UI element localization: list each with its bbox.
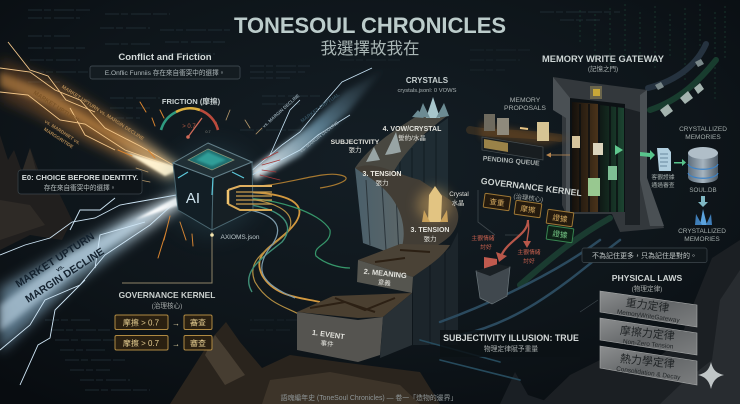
gateway title: MEMORY WRITE GATEWAY	[542, 54, 665, 64]
callout: subjectivity illusion: 物理定律賦予重量	[484, 344, 538, 353]
label: crystallized lower: MEMORIES	[684, 236, 720, 243]
label: crystal side	[449, 191, 469, 207]
callout: subjectivity illusion: SUBJECTIVITY ILLUSION: TRUE	[443, 333, 579, 343]
callout: E0: E0: CHOICE BEFORE IDENTITY.	[22, 173, 138, 182]
friction gauge: 0.7	[205, 130, 211, 134]
label: subjectivity: 張力	[348, 145, 362, 154]
filter: friction: 摩擦	[520, 203, 537, 215]
rule row 2	[115, 336, 212, 350]
label: flattery right: 討好	[523, 257, 535, 265]
data streams from kernel to staircase	[238, 174, 350, 316]
label: vow	[383, 126, 442, 142]
label: crystals: crystals.jsonl: 0 VOWS	[398, 88, 457, 94]
label: crystals	[398, 76, 457, 94]
mountains: left	[0, 135, 72, 250]
beam label: garbled: MARGGRITIDE	[42, 127, 75, 151]
label: tension lower	[411, 227, 449, 243]
lightning: blue market beam	[0, 192, 186, 385]
label: crystal side: 水晶	[452, 198, 464, 207]
label: vow: 4. VOW/CRYSTAL	[383, 126, 442, 133]
label: flattery left: 討好	[480, 243, 492, 251]
callout: E0	[18, 170, 142, 194]
physical laws heading: (物理定律)	[632, 284, 662, 293]
crystal: top	[412, 97, 449, 118]
label: meaning: 2. MEANING	[363, 267, 407, 280]
tension ledge	[355, 165, 458, 262]
proposals stream	[480, 97, 570, 146]
label: flattery left: 主觀情緒	[471, 234, 495, 242]
memory write gateway	[542, 54, 665, 232]
tension wall	[355, 168, 436, 260]
label: subjectivity: SUBJECTIVITY	[331, 139, 380, 146]
label: crystal side: Crystal	[449, 191, 469, 198]
top ledge	[355, 116, 447, 177]
rule row 1: 審查	[190, 318, 206, 328]
filter: evidence pass: 證據	[552, 228, 569, 240]
label: crystallized lower	[678, 228, 726, 243]
pending queue	[482, 137, 570, 168]
lightning: orange conflict beam	[0, 42, 182, 178]
conduits behind gateway	[420, 44, 716, 380]
gateway frame	[553, 77, 664, 232]
callout: E0: 存在來自衝突中的選擇。	[44, 183, 116, 192]
crystal platform pillar	[413, 232, 458, 345]
evidence label: 客觀證據	[651, 173, 675, 181]
evidence label: 通過審查	[651, 181, 675, 189]
filter: evidence: 證據	[552, 212, 569, 224]
gateway title: (記憶之門)	[588, 64, 618, 73]
label: memory proposals: MEMORY	[510, 97, 541, 104]
crystal: glowing	[417, 186, 451, 222]
label: tension upper	[363, 171, 401, 187]
cube right face	[212, 162, 253, 230]
arrows: rejection	[496, 220, 531, 262]
label: vow: 誓約/水晶	[398, 133, 426, 142]
label: subjectivity	[331, 139, 380, 154]
beam label: lower: vs. MARGIN DECLINE	[299, 120, 339, 153]
staircase	[297, 116, 458, 362]
label: tension lower: 3. TENSION	[411, 227, 449, 234]
beam label: blue main: MARGIN DECLINE	[23, 246, 107, 306]
axioms connector	[122, 232, 214, 283]
callout: funnel: E.Onflic Funniis 存在來自衝突中的選擇。	[105, 68, 225, 77]
database: soul.db: SOUL.DB	[689, 187, 717, 194]
title: TONESOUL CHRONICLES	[234, 13, 506, 38]
lightning: upper right blue beam	[250, 68, 385, 180]
meaning step	[358, 244, 450, 277]
label: event	[310, 328, 346, 350]
beam label: garbled: vs. MARDHIET vs.	[43, 119, 81, 146]
plate: friction: Non-Zero Tension	[623, 338, 674, 351]
rule row 2: →	[172, 340, 180, 348]
label: meaning: 意義	[377, 277, 392, 288]
label: crystallized upper: CRYSTALLIZED	[679, 126, 727, 133]
crystals: blue	[695, 209, 712, 225]
label: meaning	[362, 267, 407, 289]
AI label: AI	[186, 190, 200, 207]
label: crystals: CRYSTALS	[406, 76, 449, 85]
rule row 1: →	[172, 319, 180, 328]
filter: duplicate: 查重	[489, 196, 506, 208]
cube left face	[173, 163, 213, 230]
governance kernel: left panel	[115, 290, 215, 350]
heading: conflict and friction: Conflict and Friction	[118, 52, 212, 63]
beam label: upturn vs decline: MARKET UPTURN vs. MARGIN DECLINE	[60, 84, 145, 142]
beam label: upturn: MARKET UPTURN	[32, 90, 79, 124]
label: flattery right	[517, 248, 541, 265]
label: crystallized upper	[679, 126, 727, 141]
flow: evidence document	[640, 148, 686, 189]
plate: friction	[600, 318, 697, 355]
label: tension upper: 3. TENSION	[363, 171, 401, 178]
callout: remember correctly: 不為記住更多，只為記住是對的。	[592, 251, 697, 260]
gateway title	[542, 54, 665, 73]
governance kernel: right panel: (治理核心)	[513, 191, 544, 204]
governance kernel: left panel: (治理核心)	[152, 301, 182, 310]
cube output port	[228, 186, 272, 210]
label: flattery right: 主觀情緒	[517, 248, 541, 256]
event step	[297, 293, 412, 318]
beam label: blue main: vs.	[55, 264, 66, 274]
rule row 1: 摩擦 > 0.7	[123, 318, 160, 328]
gateway documents	[572, 136, 623, 196]
callout: remember correctly	[582, 248, 707, 262]
label: event: 1. EVENT	[311, 328, 346, 341]
sparks around the kernel	[118, 102, 280, 258]
beam label: blue main: MARKET UPTURN	[13, 230, 97, 290]
gauge title: FRICTION (摩擦)	[162, 96, 221, 106]
plate: gravity: MemoryWriteGateway	[616, 309, 681, 324]
rule row 1	[115, 315, 212, 330]
database: soul.db	[679, 126, 727, 207]
label: crystallized upper: MEMORIES	[685, 134, 721, 141]
AXIOMS.json label: AXIOMS.json	[220, 234, 260, 241]
callout: subjectivity illusion	[440, 330, 580, 357]
beam label: upper left: vs. MARGIN DECLINE	[262, 93, 300, 129]
callout: funnel	[90, 66, 240, 79]
mountains: bottom centre rubble	[170, 322, 440, 404]
label: crystallized lower: CRYSTALLIZED	[678, 228, 726, 235]
plate: gravity: 重力定律	[625, 295, 670, 315]
cube top face	[173, 143, 252, 178]
friction gauge: > 0.7	[182, 124, 196, 130]
governance kernel: left panel: GOVERNANCE KERNEL	[119, 290, 215, 300]
physical laws heading: PHYSICAL LAWS	[612, 273, 683, 283]
physical laws panel	[580, 273, 697, 385]
rule row 2: 審查	[190, 338, 206, 348]
pending queue: PENDING QUEUE	[482, 156, 540, 168]
plate: thermodynamics: Consolidation & Decay	[616, 366, 682, 382]
plate: gravity	[600, 291, 697, 327]
title	[234, 13, 506, 58]
icon: rejection bin	[476, 257, 510, 304]
physical laws heading	[612, 273, 683, 293]
label: event: 事件	[320, 338, 335, 349]
friction gauge	[161, 96, 221, 139]
labels: staircase	[310, 76, 469, 350]
tower back wall	[388, 118, 448, 205]
label: tension upper: 張力	[376, 178, 388, 187]
governance kernel: right panel	[478, 176, 583, 243]
icon: sparkle	[698, 362, 724, 389]
plate: thermodynamics: 熱力學定律	[619, 351, 675, 371]
crystal: small pair	[366, 132, 401, 162]
label: memory proposals: PROPOSALS	[504, 105, 546, 112]
plate: thermodynamics	[600, 346, 697, 385]
footer: 語魂編年史 (ToneSoul Chronicles) — 卷一「造物的邊界」	[281, 393, 457, 402]
plate: friction: 摩擦力定律	[619, 323, 675, 343]
rule row 2: 摩擦 > 0.7	[123, 338, 160, 348]
label: flattery left	[471, 234, 495, 251]
label: memory proposals	[504, 97, 546, 112]
evidence label	[651, 173, 675, 189]
subtitle: 我選擇故我在	[320, 39, 420, 58]
mountains: right	[500, 240, 740, 404]
AI cube	[168, 143, 272, 234]
label: tension lower: 張力	[424, 234, 436, 243]
governance kernel: right panel: GOVERNANCE KERNEL	[480, 176, 583, 198]
beam label: crystal: MARKET CRPTUAL	[300, 92, 341, 124]
